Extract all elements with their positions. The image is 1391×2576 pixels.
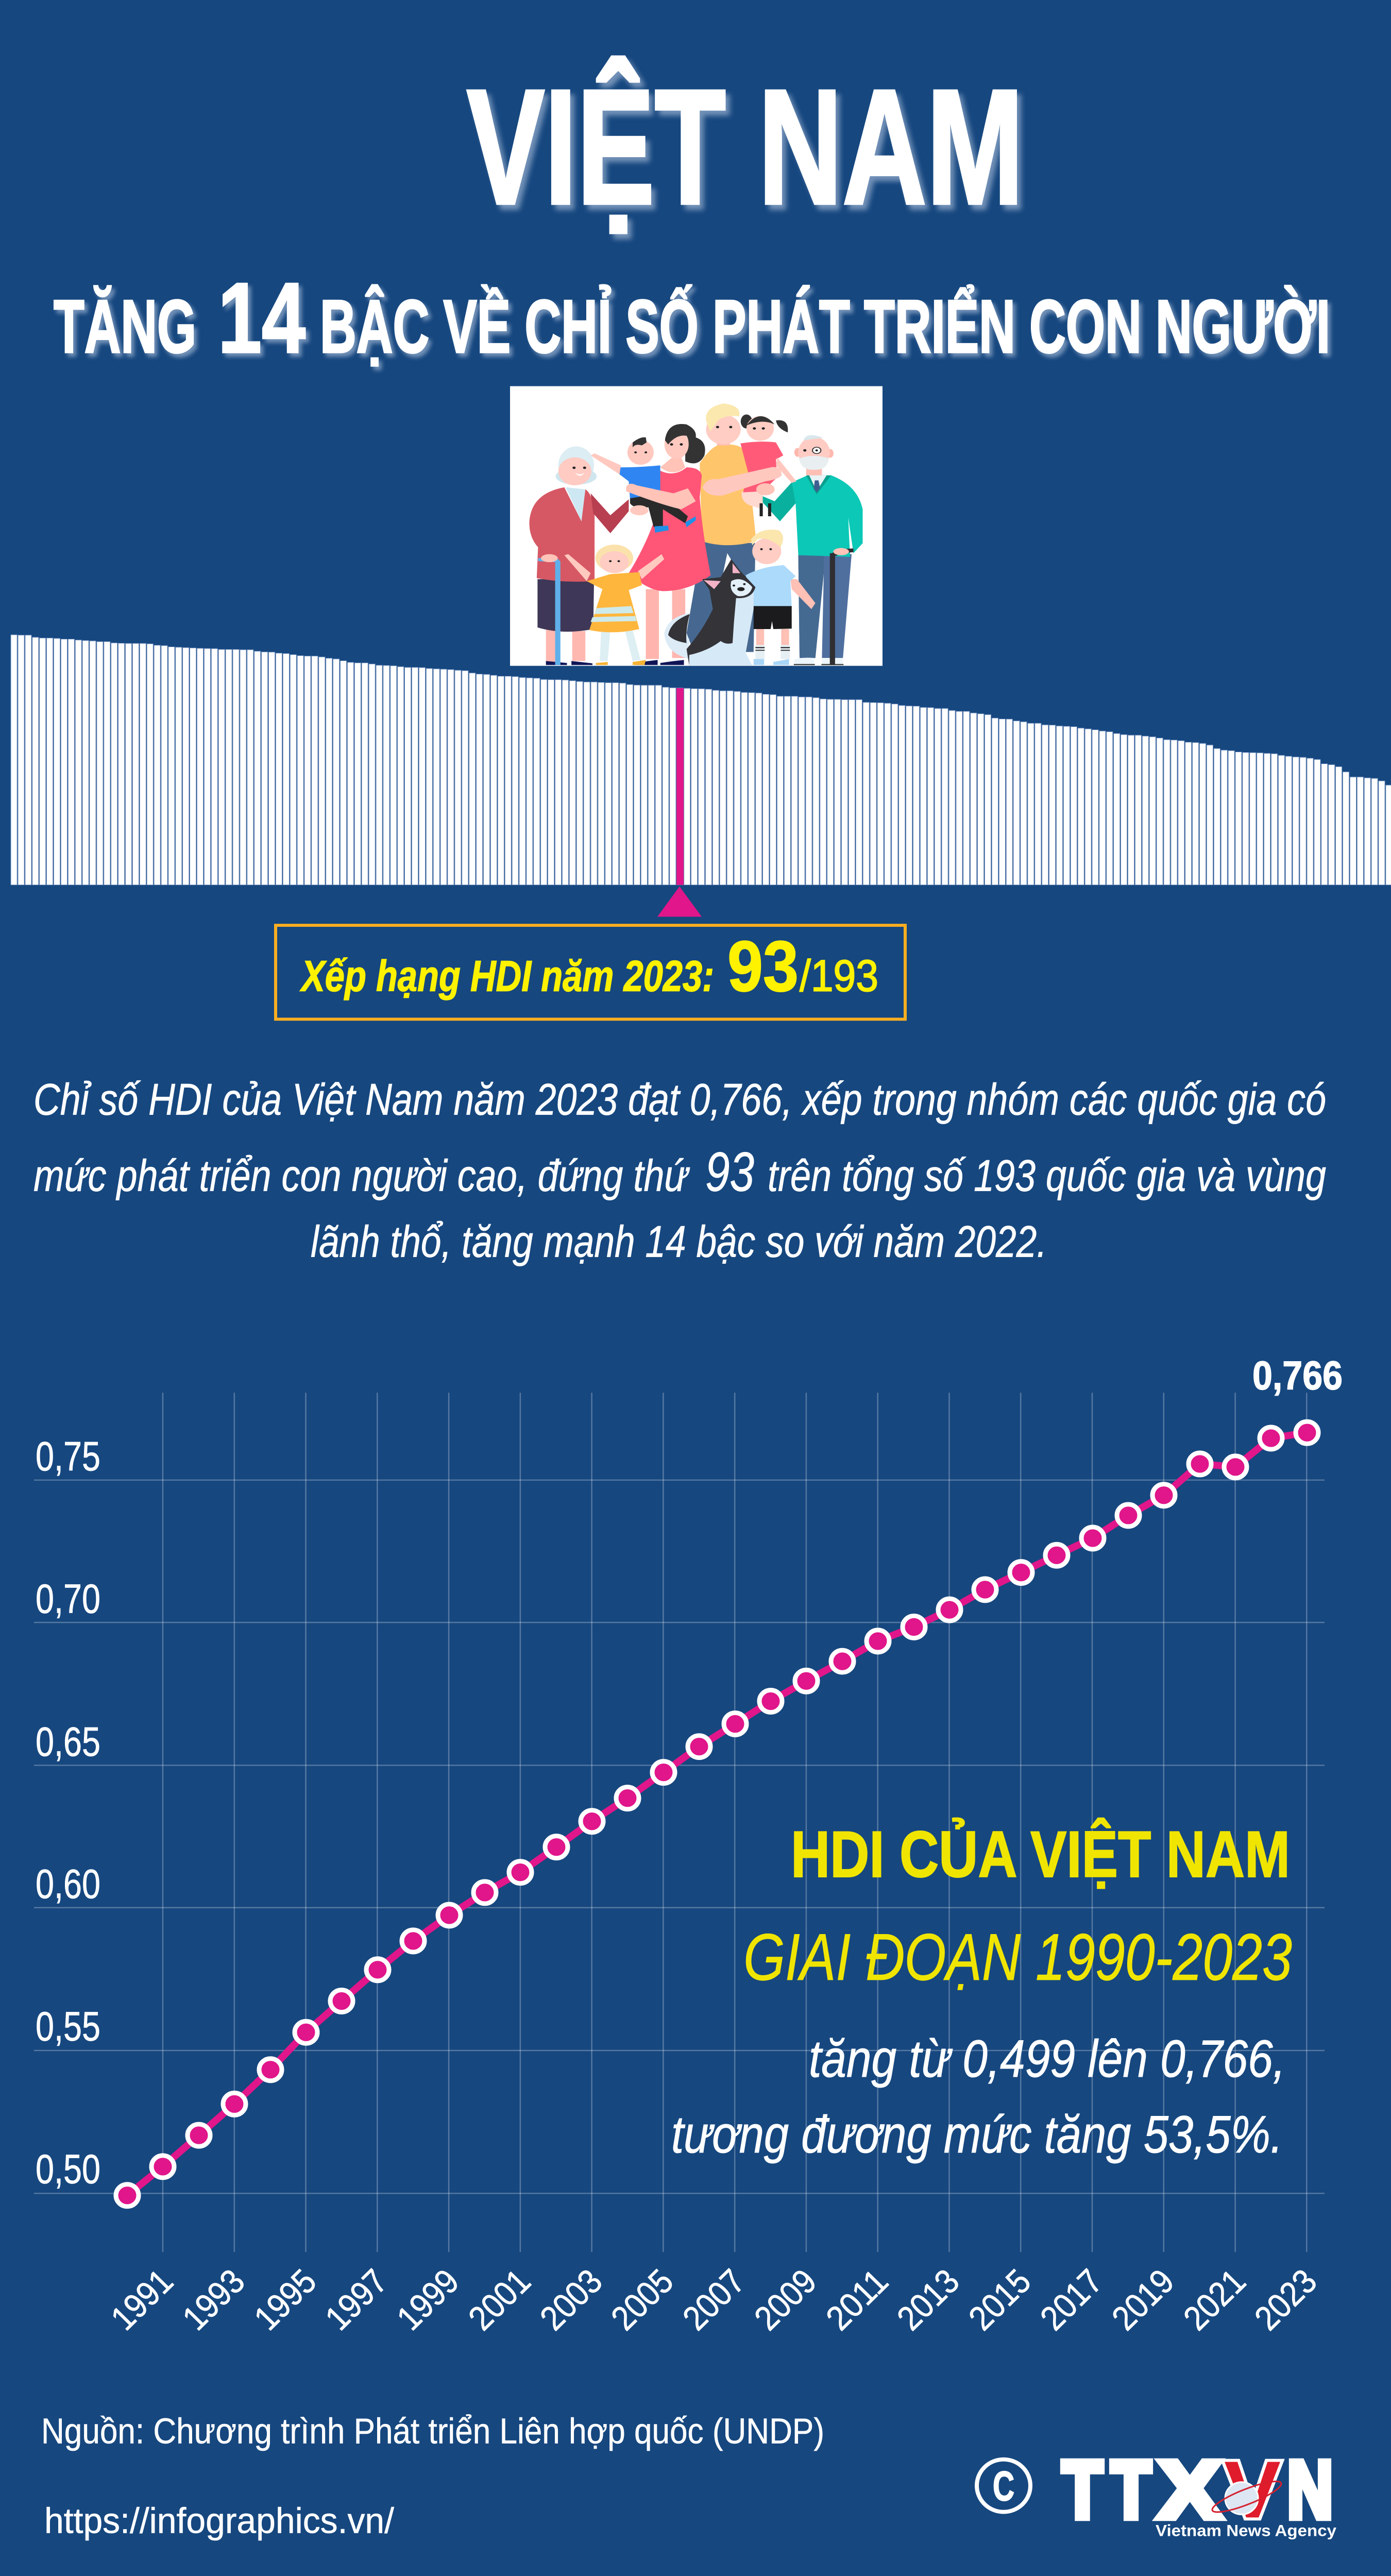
marker triangle bbox=[657, 887, 702, 917]
x-axis year labels: 1995 bbox=[247, 2262, 324, 2337]
x-axis year labels: 1993 bbox=[175, 2262, 252, 2337]
husky dog bbox=[664, 559, 755, 665]
boy bbox=[745, 530, 816, 665]
title: VIỆT NAM bbox=[467, 55, 1024, 238]
x-axis year labels: 2013 bbox=[890, 2262, 967, 2337]
baby boy bbox=[590, 437, 696, 533]
x-axis year labels: 2009 bbox=[747, 2262, 824, 2337]
mother bbox=[629, 424, 711, 665]
x-axis year labels: 2019 bbox=[1105, 2262, 1182, 2337]
father bbox=[687, 403, 756, 652]
callout: HDI rank 2023: /193 bbox=[800, 951, 878, 1001]
y-axis labels: 0,55 bbox=[36, 2003, 100, 2049]
logo: TTXVN Vietnam News Agency: V bbox=[1224, 2445, 1281, 2535]
callout: HDI rank 2023 bbox=[276, 925, 905, 1019]
x-axis year labels: 2021 bbox=[1176, 2262, 1253, 2337]
x-axis year labels: 2011 bbox=[819, 2262, 896, 2337]
line chart: Vietnam HDI 1990-2023 bbox=[34, 1352, 1343, 2337]
grandfather bbox=[762, 435, 862, 665]
logo: TTXVN Vietnam News Agency: X bbox=[1159, 2445, 1221, 2535]
icon: family illustration bbox=[529, 403, 862, 665]
y-axis labels: 0,65 bbox=[36, 1719, 100, 1765]
source note: Nguồn: Chương trình Phát triển Liên hợp quốc (UNDP) bbox=[41, 2411, 824, 2451]
x-axis year labels: 2001 bbox=[461, 2262, 538, 2337]
description text block: lãnh thổ, tăng mạnh 14 bậc so với năm 2022. bbox=[311, 1217, 1047, 1267]
callout: HDI rank 2023: 93 bbox=[727, 926, 799, 1006]
x-axis year labels: 1999 bbox=[389, 2262, 467, 2337]
subtitle: 14 bbox=[218, 262, 306, 374]
y-axis labels: 0,70 bbox=[36, 1575, 100, 1621]
logo: TTXVN Vietnam News Agency: Vietnam News Agency bbox=[1156, 2521, 1336, 2540]
description text block: 93 bbox=[705, 1141, 754, 1203]
icon: copyright bbox=[977, 2460, 1030, 2512]
y-axis labels: 0,75 bbox=[36, 1433, 100, 1479]
chart annotation block bbox=[671, 1818, 1292, 2164]
chart annotation block: tăng từ 0,499 lên 0,766, bbox=[809, 2029, 1285, 2088]
y-axis labels: 0,60 bbox=[36, 1861, 100, 1907]
x-axis year labels: 2015 bbox=[961, 2262, 1039, 2337]
data line bbox=[127, 1433, 1307, 2195]
girl carried by father bbox=[702, 414, 796, 516]
x-axis year labels: 2017 bbox=[1033, 2262, 1110, 2337]
logo: TTXVN Vietnam News Agency bbox=[1062, 2445, 1336, 2540]
little girl bbox=[564, 545, 664, 665]
subtitle bbox=[54, 262, 1330, 374]
x-axis year labels: 2007 bbox=[675, 2262, 753, 2337]
chart annotation block: tương đương mức tăng 53,5%. bbox=[671, 2105, 1283, 2164]
description text block bbox=[33, 1075, 1326, 1267]
x-axis year labels: 1997 bbox=[318, 2262, 395, 2337]
Vietnam highlighted bar bbox=[676, 688, 684, 885]
logo: TTXVN Vietnam News Agency: N bbox=[1287, 2445, 1333, 2535]
grandmother bbox=[529, 446, 629, 665]
final value label: 0,766 bbox=[1252, 1352, 1343, 1398]
y-axis labels: 0,50 bbox=[36, 2146, 100, 2192]
data point markers bbox=[116, 1421, 1318, 2207]
description text block: mức phát triển con người cao, đứng thứ bbox=[33, 1151, 690, 1200]
logo: TTXVN Vietnam News Agency: T bbox=[1111, 2445, 1151, 2535]
website url: https://infographics.vn/ bbox=[44, 2500, 394, 2541]
icon: copyright: C bbox=[993, 2464, 1014, 2510]
family illustration panel bbox=[510, 386, 883, 666]
x-axis year labels: 2003 bbox=[533, 2262, 610, 2337]
x-axis year labels bbox=[104, 2262, 1325, 2337]
x-axis year labels: 1991 bbox=[104, 2262, 181, 2337]
callout: HDI rank 2023: Xếp hạng HDI năm 2023: bbox=[300, 952, 714, 1001]
x-axis year labels: 2023 bbox=[1247, 2262, 1325, 2337]
x-axis year labels: 2005 bbox=[604, 2262, 681, 2337]
HDI ranking bars of 193 countries bbox=[11, 635, 1391, 885]
y-axis labels bbox=[36, 1433, 100, 2192]
subtitle: TĂNG bbox=[54, 284, 196, 369]
logo: TTXVN Vietnam News Agency: T bbox=[1062, 2445, 1102, 2535]
chart annotation block: HDI CỦA VIỆT NAM bbox=[791, 1818, 1290, 1891]
